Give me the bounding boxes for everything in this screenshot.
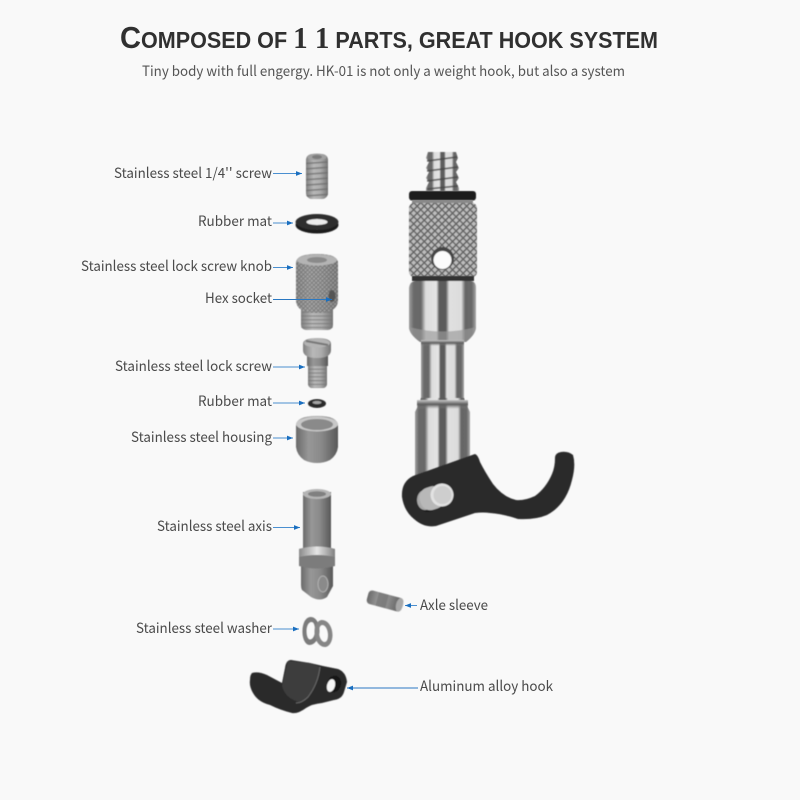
label: washer: Stainless steel washer: [136, 618, 273, 638]
label: hex socket: Hex socket: [205, 288, 273, 308]
label: housing: Stainless steel housing: [131, 427, 272, 447]
assembled hook: housing: [409, 276, 476, 342]
label: rubber mat: Rubber mat: [198, 211, 273, 231]
part: washers: [302, 617, 332, 647]
label: small rubber mat: Rubber mat: [198, 391, 273, 411]
subtitle: Tiny body with full engergy. HK-01 is not only a weight hook, but also a system: [142, 61, 625, 81]
part: lock screw: [303, 338, 331, 388]
label: lock screw: Stainless steel lock screw: [115, 356, 272, 376]
assembled hook: lower shaft: [415, 398, 470, 480]
part: aluminum alloy hook: [250, 660, 347, 713]
part: axis: [299, 489, 335, 600]
label: hex socket: [205, 288, 332, 308]
part: small rubber mat: [308, 399, 326, 408]
assembled hook: shaft: [421, 340, 464, 402]
title: COMPOSED OF 1 1 PARTS, GREAT HOOK SYSTEM: [120, 20, 658, 55]
part: axle sleeve: [366, 590, 405, 613]
label: axle sleeve: Axle sleeve: [420, 595, 488, 615]
part: lock screw knob: [296, 254, 338, 330]
label: axis: Stainless steel axis: [157, 516, 272, 536]
part: housing: [296, 416, 338, 463]
assembled hook: black washer: [409, 191, 476, 200]
assembled hook: thread: [426, 152, 459, 191]
label: stainless steel screw: Stainless steel 1/4'' screw: [114, 163, 272, 183]
part: rubber mat: [296, 214, 338, 234]
assembled hook: black hook: [402, 452, 574, 526]
assembled hook: knurled knob: [409, 200, 477, 277]
label: knob: Stainless steel lock screw knob: [81, 256, 272, 276]
label: aluminum alloy hook: Aluminum alloy hook: [420, 676, 553, 696]
part: stainless steel screw: [306, 154, 328, 199]
